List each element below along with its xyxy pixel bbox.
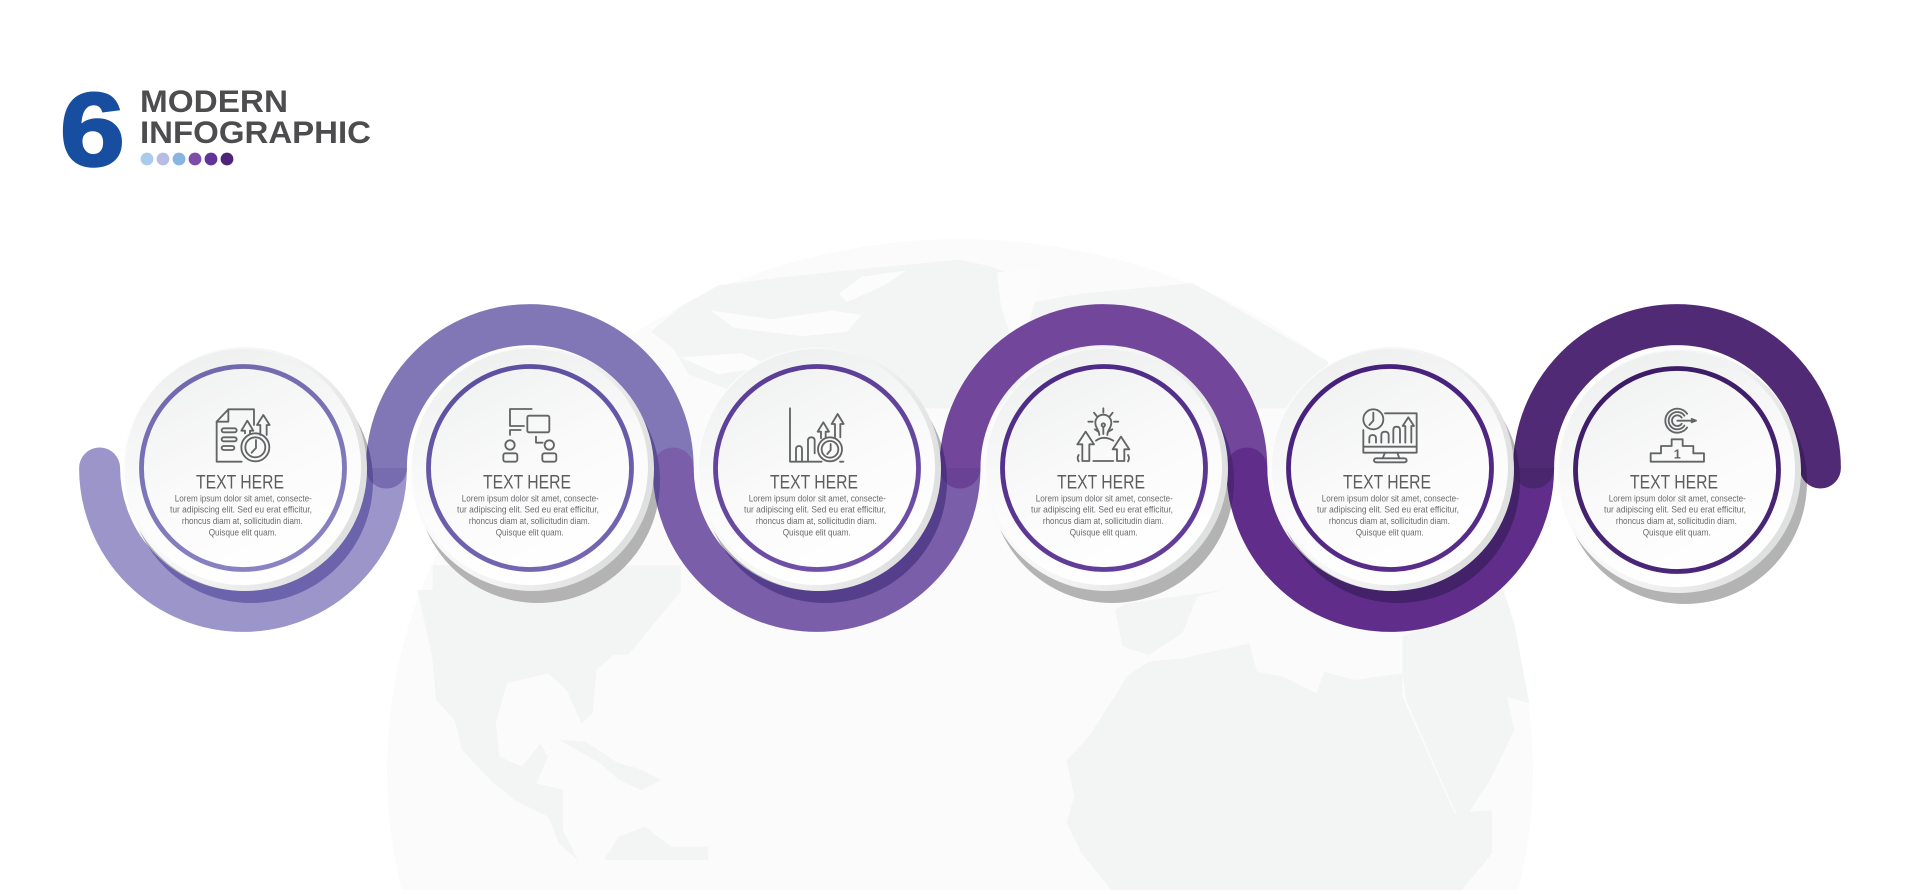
body text: rhoncus diam at, sollicitudin diam. [1616,515,1737,526]
step 6 [1557,349,1801,593]
arc 1 [100,468,386,611]
ring [1288,366,1492,570]
body text [170,492,312,538]
body text: tur adipiscing elit. Sed eu erat efficitur, [1317,504,1459,514]
ocean channels [681,268,1042,374]
arc 6 shadow from disc 5 [1514,445,1520,483]
junction overlap 2 [940,468,980,488]
arc 3 shadow [721,476,947,603]
junction overlap 3 [1513,468,1554,488]
arc 6 shadow [1790,419,1807,484]
junction overlap 1 [366,468,407,488]
arc 6 [1534,325,1820,468]
body text: Quisque elit quam. [496,526,564,538]
body text: tur adipiscing elit. Sed eu erat efficitur, [1604,504,1746,514]
arc 4 shadow [1218,421,1231,460]
ring [1576,368,1778,572]
disc shadows [129,359,1807,604]
icon: target and podium [1651,409,1704,462]
ring [428,366,632,570]
icon: monitor with chart and clock [1363,409,1417,462]
step 2 [410,347,654,591]
world map background [387,239,1533,890]
body text: Lorem ipsum dolor sit amet, consecte- [1036,492,1173,504]
heading: TEXT HERE [1057,472,1145,494]
arc 2 shadow from disc 1 [366,445,373,484]
disc [697,347,941,591]
title block [60,72,371,188]
globe [387,239,1533,890]
body text [457,492,599,538]
arc 2 shadow [644,421,658,462]
arc 1 shadow [146,474,373,603]
ring [1002,366,1206,570]
body text: tur adipiscing elit. Sed eu erat efficitur, [1031,504,1173,514]
body text: tur adipiscing elit. Sed eu erat efficitur, [744,504,886,514]
heading line 1: MODERN [140,83,288,119]
land masses: southern [417,590,1529,890]
body text [1604,492,1746,538]
arc 4 [960,325,1247,468]
heading: TEXT HERE [770,472,858,494]
body text: rhoncus diam at, sollicitudin diam. [182,515,303,526]
body text: Quisque elit quam. [209,526,277,538]
body text [1317,492,1459,538]
heading line 2: INFOGRAPHIC [140,114,371,150]
icon: target and podium: 1 [1674,448,1681,462]
body text: Lorem ipsum dolor sit amet, consecte- [175,492,312,504]
body text [1031,492,1173,538]
body text: tur adipiscing elit. Sed eu erat efficitur, [170,504,312,514]
arc 5 [1247,468,1534,611]
body text: Lorem ipsum dolor sit amet, consecte- [1609,492,1746,504]
disc [984,347,1228,591]
icon: light bulb with arrows [1077,408,1129,461]
big number 6: 6 [60,72,125,188]
step 5 [1270,347,1514,591]
icon: document with clock and arrows [217,409,270,462]
body text: Quisque elit quam. [783,526,851,538]
colour dots [141,153,233,165]
body text: tur adipiscing elit. Sed eu erat efficitur, [457,504,599,514]
body text: Quisque elit quam. [1643,526,1711,538]
icon: flow chart with people [503,409,556,462]
disc [410,347,654,591]
arc 5 shadow [1292,474,1520,603]
icon: bar chart with clock [790,408,844,462]
disc [123,347,367,591]
body text: Quisque elit quam. [1356,526,1424,538]
disc [1270,347,1514,591]
step 3 [697,347,941,591]
land masses: northern [433,260,1328,655]
heading: TEXT HERE [1343,472,1431,494]
arc 3 [673,468,960,611]
body text: Quisque elit quam. [1070,526,1138,538]
body text [744,492,886,538]
arc 2 [386,325,673,468]
body text: rhoncus diam at, sollicitudin diam. [1329,515,1450,526]
arc 3 shadow from disc 2 [653,456,660,507]
arc 4 shadow from disc 3 [940,444,947,484]
step 1 [123,347,367,591]
body text: Lorem ipsum dolor sit amet, consecte- [749,492,886,504]
body text: rhoncus diam at, sollicitudin diam. [469,515,590,526]
body text: rhoncus diam at, sollicitudin diam. [756,515,877,526]
body text: Lorem ipsum dolor sit amet, consecte- [462,492,599,504]
heading: TEXT HERE [483,472,571,494]
ring [142,366,344,570]
disc [1557,349,1801,593]
heading: TEXT HERE [1630,472,1718,494]
heading: TEXT HERE [196,472,284,494]
arc 5 shadow from disc 4 [1227,455,1234,508]
step 4 [984,347,1228,591]
spiral ribbon [100,325,1820,611]
body text: rhoncus diam at, sollicitudin diam. [1043,515,1164,526]
ring [716,366,918,570]
body text: Lorem ipsum dolor sit amet, consecte- [1322,492,1459,504]
